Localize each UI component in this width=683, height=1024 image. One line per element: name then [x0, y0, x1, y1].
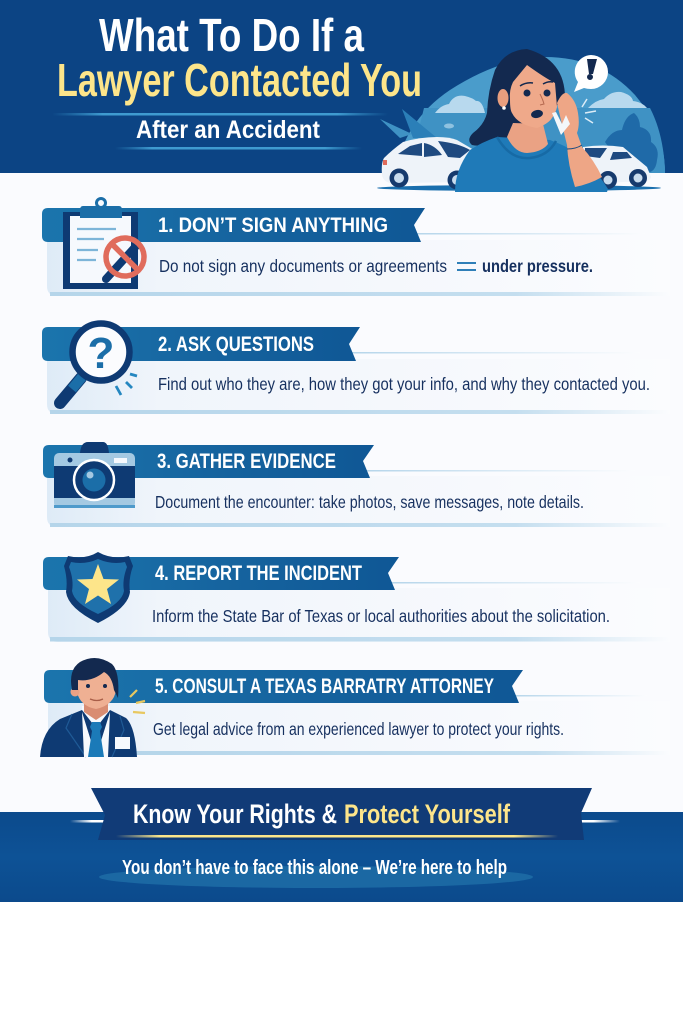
heading: 3. GATHER EVIDENCE — [157, 450, 336, 473]
lower backdrop shade — [408, 108, 665, 173]
card background — [47, 359, 670, 414]
body text: Inform the State Bar of Texas or local authorities about the solicitation. — [152, 606, 610, 626]
footer highlight ellipse — [99, 866, 533, 888]
title — [57, 9, 422, 106]
arm and hand — [557, 93, 602, 187]
footer side accents — [70, 820, 620, 822]
crash burst second spike — [402, 109, 437, 138]
nose — [540, 94, 544, 105]
earring — [502, 106, 506, 110]
panel: step 1 — [42, 198, 670, 296]
card background — [47, 476, 670, 527]
phone — [552, 112, 570, 135]
panel: step 4 — [43, 552, 670, 642]
card background — [48, 588, 670, 642]
ground shadow — [377, 185, 661, 191]
hair back — [469, 49, 565, 146]
illustration: woman on phone after car accident — [377, 49, 665, 192]
clouds — [435, 92, 647, 113]
card stripe — [50, 410, 670, 414]
card stripe — [50, 637, 670, 642]
right car — [583, 146, 651, 189]
banner line — [350, 352, 640, 354]
torso — [455, 137, 608, 192]
heading: 4. REPORT THE INCIDENT — [155, 562, 362, 585]
icon: magnifying glass with question mark — [60, 324, 137, 403]
eyes — [524, 90, 550, 96]
banner — [43, 445, 374, 478]
banner line — [415, 233, 645, 234]
footer gold rule — [116, 835, 558, 838]
body text: Get legal advice from an experienced lawyer to protect your rights. — [153, 719, 564, 739]
card stripe — [50, 292, 670, 296]
card stripe — [50, 523, 670, 527]
banner line — [390, 582, 640, 584]
title: Lawyer Contacted You — [57, 54, 422, 106]
footer tagline: You don’t have to face this alone – We’re here to help — [122, 857, 507, 879]
footer heading: Know Your Rights & — [133, 799, 337, 829]
body text: Do not sign any documents or agreements — [159, 256, 447, 276]
body text: Document the encounter: take photos, save messages, note details. — [155, 492, 584, 512]
heading: 5. CONSULT A TEXAS BARRATRY ATTORNEY — [155, 675, 494, 698]
equals mark — [457, 263, 476, 270]
banner — [43, 557, 399, 590]
neck — [507, 123, 548, 153]
alert ticks — [582, 99, 596, 123]
icon: attorney — [40, 658, 145, 757]
header band — [0, 0, 683, 173]
trees — [605, 113, 658, 172]
icon: camera — [54, 442, 135, 508]
banner — [42, 208, 425, 242]
left car — [382, 137, 474, 190]
banner line — [512, 695, 647, 696]
emphasis text: under pressure. — [482, 256, 593, 276]
bubble mark — [587, 59, 597, 80]
footer heading: Protect Yourself — [344, 799, 511, 829]
heading: 2. ASK QUESTIONS — [158, 333, 314, 356]
scene backdrop — [395, 57, 665, 173]
neckline — [497, 137, 556, 158]
small cloud — [444, 124, 454, 128]
face — [510, 65, 557, 128]
icon: magnifying glass with question mark: ? — [88, 329, 114, 378]
footer ribbon — [91, 788, 592, 840]
mouth — [530, 109, 544, 119]
card stripe — [130, 751, 670, 755]
bracelet — [567, 145, 582, 149]
card background — [48, 701, 670, 755]
icon: clipboard with crossed-out pen — [63, 198, 144, 289]
icon: police shield with star — [64, 552, 133, 623]
banner — [44, 670, 523, 703]
banner line — [365, 470, 635, 472]
banner — [42, 327, 360, 361]
heading: 1. DON’T SIGN ANYTHING — [158, 214, 388, 237]
card background — [47, 240, 670, 296]
bubble — [574, 55, 608, 92]
panel: step 5 — [40, 658, 670, 757]
ear — [498, 89, 508, 107]
footer band — [0, 812, 683, 902]
panel: step 3 — [43, 442, 670, 527]
subtitle: After an Accident — [136, 116, 321, 144]
title: What To Do If a — [99, 9, 364, 61]
panel: step 2 — [42, 324, 670, 414]
brows — [520, 82, 553, 86]
crash burst — [380, 119, 412, 138]
